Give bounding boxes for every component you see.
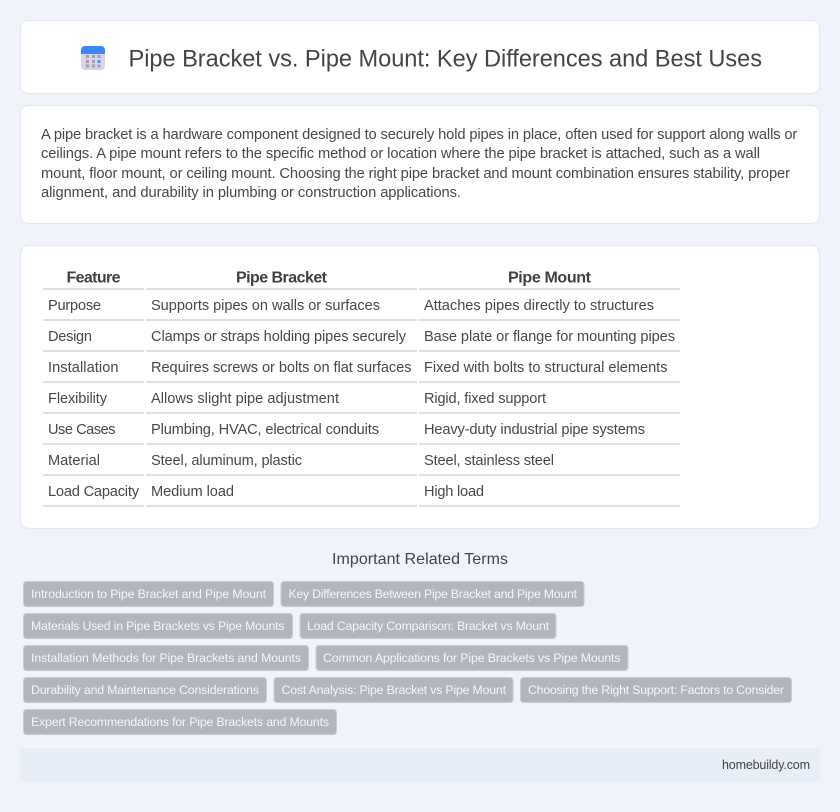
panel: comparison table [20,246,820,528]
row: design: Base plate or flange for mounting pipes [424,329,675,345]
row: material: Material [48,453,100,469]
row: use cases: Plumbing, HVAC, electrical conduits [151,422,379,438]
tag: Durability and Maintenance Considerations [31,683,259,697]
tag: Expert Recommendations for Pipe Brackets and Mounts [31,715,329,729]
icon: calendar [81,46,105,70]
tag: Installation Methods for Pipe Brackets and Mounts [31,651,301,665]
tag [24,614,292,638]
row: purpose: Purpose [48,298,101,314]
row: flexibility [48,391,546,407]
row: flexibility: Rigid, fixed support [424,391,546,407]
row: installation: Installation [48,360,118,376]
row: purpose [48,298,654,314]
intro paragraph: A pipe bracket is a hardware component designed to securely hold pipes in place, often used for support along walls or [41,127,797,143]
table header [66,270,592,286]
table header: Feature [66,270,121,286]
tag [24,678,266,702]
related terms tags [24,582,792,734]
row: purpose: Attaches pipes directly to structures [424,298,654,314]
tag: Load Capacity Comparison: Bracket vs Mount [307,619,550,633]
table header: Pipe Bracket [236,270,328,286]
tag: Common Applications for Pipe Brackets vs Pipe Mounts [323,651,620,665]
row: material: Steel, aluminum, plastic [151,453,302,469]
row: material [48,453,554,469]
tag [24,710,336,734]
row: use cases [48,422,645,438]
row: load capacity: High load [424,484,484,500]
tag [274,678,513,702]
row: load capacity: Medium load [151,484,234,500]
tag: Materials Used in Pipe Brackets vs Pipe Mounts [31,619,284,633]
row: installation: Fixed with bolts to structural elements [424,360,668,376]
tag: Cost Analysis: Pipe Bracket vs Pipe Mount [282,683,507,697]
row: flexibility: Flexibility [48,391,108,407]
tag [281,582,584,606]
row: material: Steel, stainless steel [424,453,554,469]
row: load capacity: Load Capacity [48,484,140,500]
row: installation: Requires screws or bolts on flat surfaces [151,360,412,376]
tag [316,646,628,670]
intro paragraph [41,127,797,201]
tag: Key Differences Between Pipe Bracket and Pipe Mount [288,587,578,601]
row: use cases: Use Cases [48,422,116,438]
row: installation [48,360,668,376]
row: use cases: Heavy-duty industrial pipe systems [424,422,645,438]
intro paragraph: ceilings. A pipe mount refers to the specific method or location where the pipe bracket is attached, such as a wall [41,146,760,162]
footer [20,748,820,782]
row: design [48,329,675,345]
row: design: Design [48,329,92,345]
related terms heading: Important Related Terms [332,551,508,568]
tag: Introduction to Pipe Bracket and Pipe Mount [31,587,267,601]
title: Pipe Bracket vs. Pipe Mount: Key Differences and Best Uses [128,46,762,72]
footer site name: homebuildy.com [722,758,810,772]
intro paragraph: mount, floor mount, or ceiling mount. Choosing the right pipe bracket and mount combination ensures stability, proper [41,166,790,182]
tag [24,646,308,670]
row: design: Clamps or straps holding pipes securely [151,329,407,345]
row: load capacity [48,484,484,500]
intro paragraph: alignment, and durability in plumbing or construction applications. [41,185,461,201]
tag [300,614,556,638]
tag [24,582,274,606]
row: purpose: Supports pipes on walls or surfaces [151,298,380,314]
tag: Choosing the Right Support: Factors to Consider [528,683,784,697]
tag [520,678,792,702]
table header: Pipe Mount [508,270,592,286]
header panel [20,20,820,94]
panel: intro text [20,106,820,224]
row: flexibility: Allows slight pipe adjustment [151,391,339,407]
